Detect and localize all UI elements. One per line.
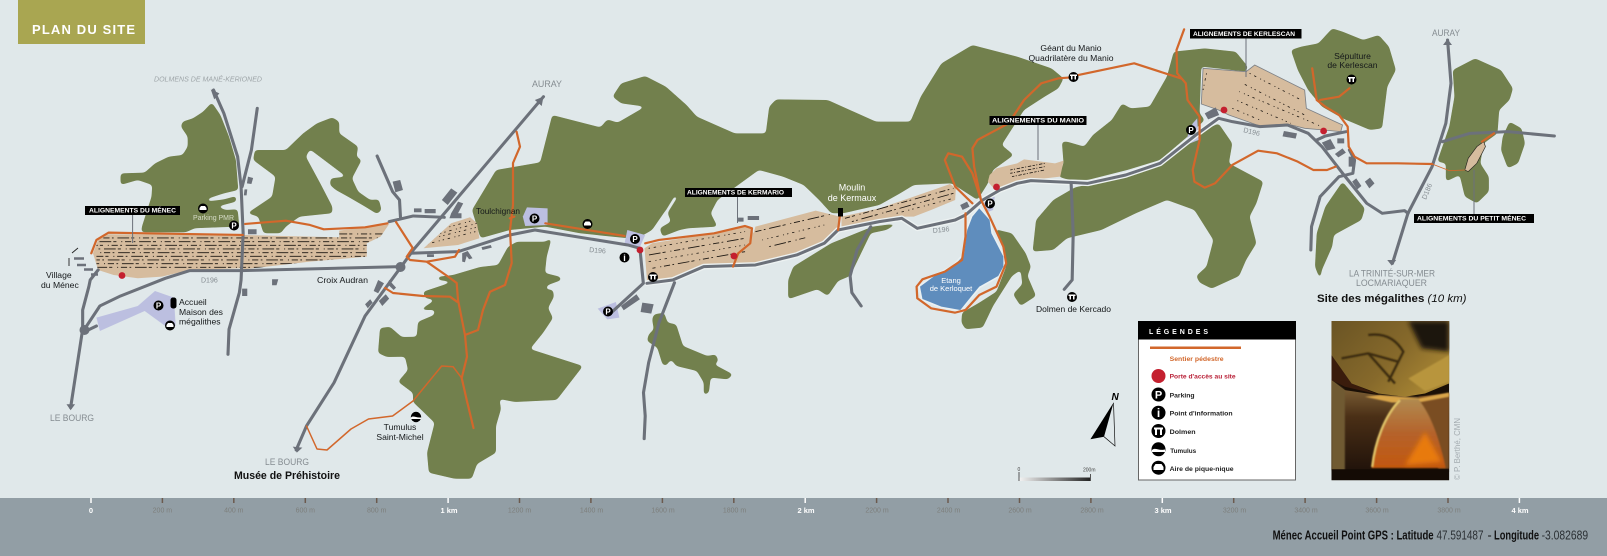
text: Village du Ménec: du Ménec — [41, 280, 79, 290]
ruler labels: 3200 m — [1223, 508, 1246, 514]
forest: below D196 east — [1315, 182, 1365, 280]
icon: information: i — [623, 253, 626, 263]
icon: picnic Accueil — [165, 320, 175, 330]
ruler labels: 200 m — [153, 508, 172, 514]
gate: Ménec — [119, 272, 125, 279]
icon: information — [620, 252, 630, 263]
forest: Dolmens de Mané-Kerioned — [121, 102, 239, 232]
legend panel — [1138, 321, 1296, 480]
text: Le Bourg east: LE BOURG — [265, 457, 309, 467]
text: Accueil Maison des mégalithes — [179, 297, 223, 326]
text: Toulchignan: Toulchignan — [476, 206, 520, 216]
title: Plan du site: PLAN DU SITE — [32, 22, 135, 37]
gate: Kermario west — [637, 247, 643, 253]
panel: distance ruler — [0, 498, 1607, 556]
text: Géant du Manio: Géant du Manio — [1040, 43, 1102, 53]
ruler labels: 2800 m — [1080, 508, 1104, 514]
legend: parking: Parking — [1170, 392, 1195, 400]
ruler labels: 1200 m — [508, 508, 531, 514]
text: D196 Kermario: D196 — [589, 247, 606, 255]
text: La Trinité-sur-Mer Locmariaquer: LA TRINITÉ-SUR-MER — [1349, 268, 1435, 278]
text: Parking PMR: Parking PMR — [193, 213, 235, 222]
forest: Croix Audran north — [247, 117, 382, 233]
text: Moulin de Kermaux: de Kermaux — [828, 193, 877, 203]
text: Géant du Manio — [1028, 43, 1114, 63]
gate: Kerlescan west — [1221, 107, 1227, 113]
parking area: Toulchignan — [523, 207, 548, 226]
ruler labels: 1400 m — [580, 508, 603, 514]
arrow: Le Bourg west — [66, 404, 75, 410]
parking area: Accueil — [96, 291, 176, 331]
panel: map — [41, 28, 1554, 482]
label: alignements du Ménec: ALIGNEMENTS DU MÉNEC — [89, 206, 176, 215]
alignment field: Ménec — [93, 224, 389, 278]
text: D196 Moulin: D196 — [932, 226, 950, 235]
arrow: Le Bourg east — [293, 447, 302, 453]
legend: access gate: Porte d'accès au site — [1170, 374, 1236, 380]
icon: parking PMR — [229, 220, 239, 230]
GPS coordinates: -3.082689 — [1542, 528, 1588, 542]
legend: tumulus — [1152, 442, 1197, 456]
village du Ménec marks — [69, 248, 78, 266]
forest: Manio north — [1058, 48, 1248, 180]
text: Accueil Maison des mégalithes: Maison des — [179, 307, 223, 317]
icon: parking Kermario: P — [632, 235, 638, 244]
arrowheads — [66, 39, 1452, 453]
road: D196 Toulchignan — [410, 230, 643, 313]
legend: information: i — [1157, 406, 1160, 420]
text: Etang de Kerloquet: de Kerloquet — [930, 284, 973, 293]
text: Géant du Manio: Quadrilatère du Manio — [1028, 53, 1114, 63]
gate: Manio — [993, 184, 1000, 190]
ruler labels: 3600 m — [1365, 508, 1389, 514]
GPS coordinates: 47.591487 — [1436, 528, 1484, 542]
ruler labels — [89, 506, 1529, 515]
legend: information: Point d'information — [1170, 410, 1233, 418]
label: alignements du Petit Ménec — [1414, 214, 1534, 223]
scale bar: 0 — [1018, 467, 1020, 473]
parking area: Kerlescan — [1186, 118, 1199, 145]
label: alignements du Petit Ménec: ALIGNEMENTS DU PETIT MÉNEC — [1417, 214, 1526, 223]
arrow: La Trinité — [1387, 260, 1396, 266]
label: alignements de Kerlescan — [1190, 29, 1302, 38]
text: Sépulture de Kerlescan: Sépulture — [1334, 51, 1371, 61]
road: D196 Kermario to Kerlescan — [647, 118, 1408, 283]
text: Auray east: AURAY — [1432, 28, 1460, 38]
text: Sépulture de Kerlescan: de Kerlescan — [1327, 60, 1378, 70]
arrow: Auray east — [1443, 39, 1452, 45]
arrow: Mané-Kerioned — [211, 89, 219, 99]
forest: Dolmen de Kercado — [1033, 123, 1263, 289]
ruler labels: 2 km — [797, 506, 815, 515]
legend: picnic area — [1152, 461, 1234, 475]
ruler labels: 400 m — [224, 508, 244, 514]
ruler labels: 800 m — [367, 508, 387, 514]
footpaths — [91, 29, 1494, 450]
legend header — [1138, 321, 1296, 340]
alignment field: Kerlescan — [1201, 65, 1343, 132]
forest: Petit Ménec east — [1501, 122, 1525, 168]
forest: south of Kermario — [647, 313, 733, 395]
ruler labels: 0 — [89, 506, 93, 515]
forest: Kermario and Toulchignan — [472, 45, 1064, 238]
text: Croix Audran: Croix Audran — [317, 275, 368, 285]
ruler labels: 1 km — [440, 506, 458, 515]
alignment field: Manio — [988, 159, 1064, 188]
forest: Petit Ménec — [1437, 58, 1513, 203]
icon: parking Manio: P — [987, 200, 993, 208]
ruler labels: 3 km — [1154, 506, 1172, 515]
label: alignements du Ménec — [85, 206, 180, 215]
legend: footpath — [1150, 346, 1241, 363]
text: Le Bourg west: LE BOURG — [50, 413, 94, 423]
ruler labels: 1600 m — [651, 508, 675, 514]
footpath: Sépulture de Kerlescan — [1312, 68, 1494, 164]
icon: parking Kerlescan — [1186, 125, 1196, 135]
legend: dolmen — [1152, 424, 1196, 438]
parking area: Manio — [983, 197, 995, 213]
text: Village du Ménec — [41, 270, 79, 290]
ruler labels: 2200 m — [865, 508, 889, 514]
legend: footpath: Sentier pédestre — [1170, 356, 1224, 363]
ruler labels: 2600 m — [1008, 508, 1032, 514]
scale bar — [1018, 467, 1096, 481]
legend: parking — [1152, 388, 1195, 402]
lake: Etang de Kerloquet — [920, 208, 1003, 310]
text: Etang de Kerloquet: Etang — [941, 276, 961, 285]
lake water — [920, 208, 1003, 310]
legend: parking: P — [1155, 390, 1162, 402]
footpath: Ménec — [91, 221, 387, 253]
photo credit: © P. Berthé, CMN — [1453, 418, 1462, 480]
ruler kilometre ticks — [91, 498, 1519, 503]
road: Kermario south — [643, 283, 674, 439]
scale bar: 200m — [1083, 468, 1096, 474]
roads — [71, 40, 1554, 450]
legend: dolmen: Dolmen — [1170, 429, 1196, 436]
text: D186: D186 — [1421, 183, 1434, 201]
ruler ticks — [162, 498, 1448, 503]
text: Moulin de Kermaux — [828, 182, 877, 203]
text: Auray: AURAY — [532, 79, 562, 89]
road: D186 — [1392, 40, 1451, 263]
footpath: Kerlescan — [1074, 29, 1336, 188]
gate: Kermario — [731, 253, 737, 259]
text: Sépulture de Kerlescan — [1327, 51, 1378, 70]
legend header: LÉGENDES — [1149, 327, 1208, 336]
gate: Kerlescan east — [1320, 128, 1327, 134]
roundabout: Accueil — [80, 325, 90, 335]
photo: interior of dolmen — [1331, 321, 1450, 480]
label: alignements de Kermario: ALIGNEMENTS DE KERMARIO — [687, 190, 784, 197]
road: Kerlescan branch — [1311, 132, 1355, 250]
ruler labels: 3400 m — [1294, 508, 1318, 514]
alignment field: Kermario — [645, 184, 956, 283]
road stub: Accueil — [86, 326, 96, 331]
forest: Sépulture de Kerlescan — [1291, 28, 1396, 130]
legend: picnic area: Aire de pique-nique — [1170, 466, 1234, 473]
alignment field: Toulchignan — [424, 217, 479, 248]
icon: parking Kerlescan: P — [1188, 126, 1194, 135]
ruler labels: 1800 m — [723, 508, 746, 514]
arrow: Auray — [535, 97, 543, 106]
GPS coordinates: Ménec Accueil Point GPS : Latitude — [1273, 528, 1434, 542]
forests — [121, 28, 1525, 479]
text: D196 west: D196 — [201, 278, 218, 284]
icon: dolmen Géant du Manio — [1068, 72, 1078, 82]
icon: Moulin de Kermaux — [838, 208, 843, 216]
GPS coordinates: Longitude — [1494, 528, 1539, 542]
icon: dolmen Kermario — [648, 272, 658, 282]
text: La Trinité-sur-Mer Locmariaquer — [1349, 268, 1435, 288]
text: La Trinité-sur-Mer Locmariaquer: LOCMARIAQUER — [1356, 278, 1427, 288]
buildings — [242, 107, 1375, 314]
forest: Saint-Michel — [378, 238, 583, 479]
icon: picnic Toulchignan — [582, 219, 592, 229]
north arrow — [1090, 392, 1120, 446]
ruler labels: 4 km — [1511, 506, 1529, 515]
parking area: Kermario south — [598, 302, 619, 319]
text: Tumulus Saint-Michel — [376, 422, 424, 442]
icon: parking Manio — [985, 198, 995, 208]
text: D196 Kerlescan: D196 — [1243, 127, 1261, 138]
text: Accueil Maison des mégalithes: mégalithes — [179, 316, 221, 326]
leader lines — [133, 38, 1474, 243]
road: north of Croix Audran — [377, 156, 444, 222]
forest: east of Etang de Kerloquet — [961, 215, 1036, 329]
icon: picnic PMR — [198, 204, 208, 214]
alignment field: Petit Ménec — [1465, 142, 1485, 172]
icon: tumulus — [411, 412, 421, 422]
forest: south of Moulin de Kermaux — [788, 223, 898, 299]
icon: parking Toulchignan: P — [532, 214, 538, 224]
icon: parking PMR: P — [231, 222, 237, 230]
text: Village du Ménec: Village — [46, 270, 72, 280]
road: to Le Bourg west — [71, 270, 98, 408]
road: north branch — [242, 108, 257, 187]
north arrow: N — [1112, 392, 1120, 403]
GPS coordinates — [1273, 528, 1588, 542]
icon: parking Toulchignan — [530, 214, 540, 224]
legend: tumulus: Tumulus — [1170, 448, 1197, 455]
text: Dolmen de Kercado: Dolmen de Kercado — [1036, 304, 1111, 314]
label: alignements de Kerlescan: ALIGNEMENTS DE KERLESCAN — [1193, 31, 1295, 38]
icon: dolmen Kerlescan — [1346, 74, 1356, 84]
legend: information — [1152, 406, 1233, 420]
text: Moulin de Kermaux: Moulin — [839, 182, 865, 192]
text: Site des mégalithes: Site des mégalithes (10 km) — [1317, 293, 1467, 305]
icon: parking Kermario — [630, 234, 640, 244]
footpath: Petit Ménec — [1432, 164, 1465, 171]
icon: dolmen Kercado — [1067, 292, 1077, 302]
text: Dolmens de Mané-Kerioned: DOLMENS DE MANÉ-KERIONED — [154, 74, 263, 84]
ruler labels: 3800 m — [1437, 508, 1461, 514]
ruler labels: 600 m — [296, 508, 315, 514]
road: Dolmen de Kercado — [1064, 183, 1073, 289]
parking area: Kermario — [625, 230, 645, 247]
road: D196 west — [84, 267, 401, 329]
icon: parking Accueil: P — [156, 302, 162, 310]
footpath: Toulchignan to Kermario — [510, 217, 840, 267]
text: Tumulus Saint-Michel: Tumulus — [384, 422, 416, 432]
road halos — [645, 118, 1219, 283]
icon: parking Kermario south — [603, 306, 613, 316]
legend: access gate — [1152, 369, 1236, 383]
text: Etang de Kerloquet — [930, 276, 973, 293]
text: Tumulus Saint-Michel: Saint-Michel — [376, 432, 424, 442]
label: alignements du Manio — [990, 116, 1086, 125]
road: to Dolmens de Mané-Kerioned — [214, 90, 243, 354]
ruler labels: 2400 m — [937, 508, 960, 514]
text: Musée de Préhistoire: Musée de Préhistoire — [234, 470, 340, 482]
label: alignements du Manio: ALIGNEMENTS DU MANIO — [992, 118, 1084, 125]
icon: parking Accueil — [154, 300, 164, 310]
text: Accueil Maison des mégalithes: Accueil — [179, 297, 207, 307]
village du Ménec buildings — [74, 258, 98, 274]
access gates — [119, 107, 1327, 279]
title: Plan du site — [18, 0, 145, 44]
roundabout: Croix Audran — [396, 262, 406, 272]
road: Moulin south — [850, 227, 871, 306]
GPS coordinates: - — [1488, 528, 1492, 542]
icon: Accueil — [170, 298, 176, 308]
road: Auray to Le Bourg — [296, 97, 543, 450]
icon: parking Kermario south: P — [605, 308, 611, 316]
footpath: Tumulus Saint-Michel — [306, 366, 462, 450]
footpath: Kerloquet and Manio — [917, 77, 1072, 313]
road: Petit Ménec — [1442, 132, 1554, 142]
footpath: Croix Audran and Saint-Michel forest — [385, 132, 520, 428]
